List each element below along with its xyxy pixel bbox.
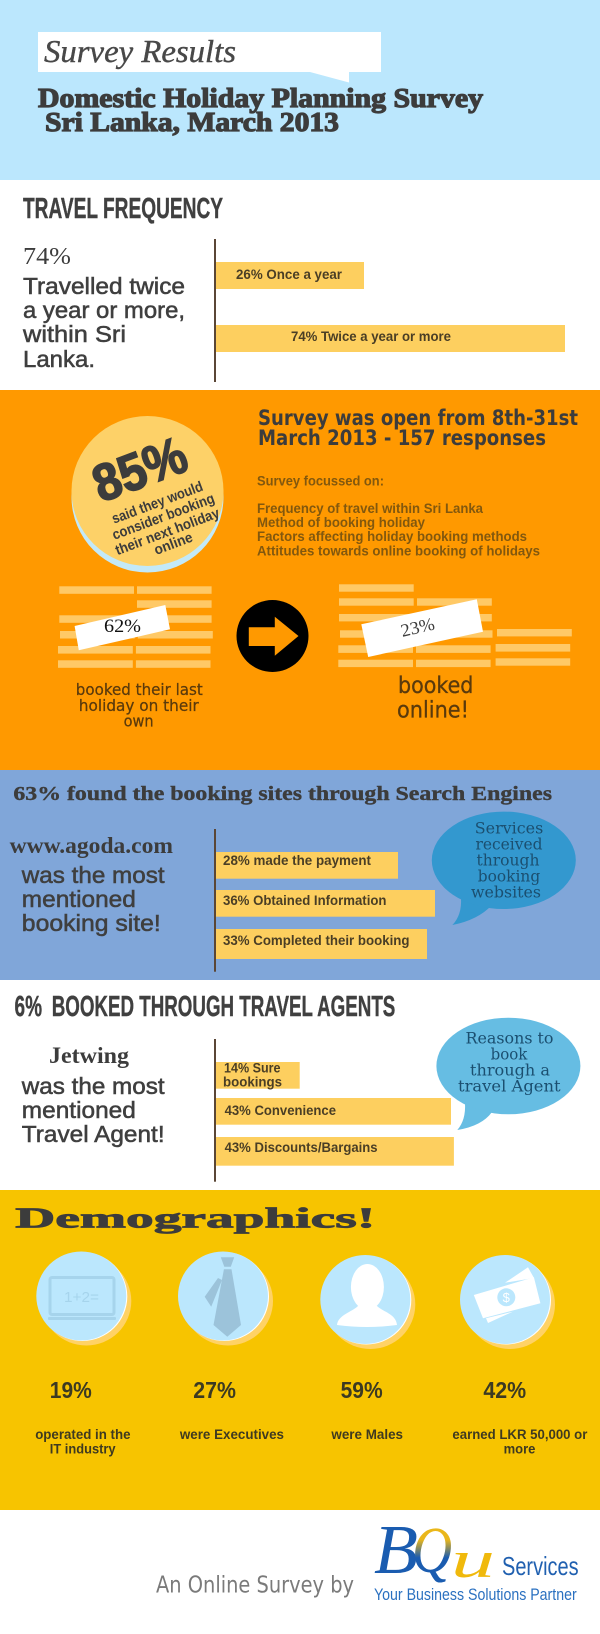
badge: 85%: [72, 416, 224, 572]
bar chart: bookings: [223, 1075, 282, 1090]
callout: services: websites: [471, 883, 541, 902]
caption: booked online: [397, 673, 473, 724]
title line 1: Domestic Holiday Planning Survey: [38, 83, 484, 113]
bar chart: 33% Completed their booking: [223, 933, 410, 948]
description: booking site!: [22, 910, 161, 936]
survey focus list: Frequency of travel within Sri Lanka: [257, 501, 483, 516]
caption: booked on their own: own: [124, 712, 154, 731]
callout: reasons: book: [491, 1044, 528, 1063]
heading: 6%: [14, 991, 42, 1023]
callout: reasons: [436, 1018, 580, 1130]
bar chart: [214, 829, 435, 972]
description: Lanka.: [23, 346, 95, 372]
bar chart: 43% Convenience: [225, 1103, 336, 1118]
stat: executives: were Executives: [179, 1427, 284, 1442]
callout: services: booking: [478, 867, 540, 886]
panel: travel agents: [14, 991, 580, 1182]
panel: footer: [156, 1512, 579, 1604]
caption: booked online: booked: [398, 673, 473, 699]
stat: income: more: [504, 1441, 536, 1456]
panel: booking sites: [0, 770, 600, 980]
bar chart: 26% Once a year: [236, 267, 343, 282]
label text: Survey Results: Survey Results: [44, 33, 236, 69]
description: Travel Agent!: [22, 1121, 165, 1147]
callout: reasons: Reasons to: [466, 1028, 554, 1047]
description: [21, 862, 165, 936]
caption: booked on their own: holiday on their: [79, 696, 199, 715]
panel: header: [0, 0, 600, 180]
callout: services: received: [476, 834, 542, 853]
heading: 63% found the booking sites through Search Engines: [13, 783, 552, 805]
caption: booked on their own: [76, 680, 203, 731]
stat: males: were Males: [330, 1427, 403, 1442]
logo: B: [374, 1512, 418, 1589]
callout: services: through: [476, 850, 540, 869]
callout: services: [432, 812, 576, 925]
icon: laptop: 1+2=: [64, 1289, 99, 1306]
icon: laptop: [36, 1252, 131, 1346]
survey dates: March 2013 - 157 responses: [258, 426, 546, 450]
panel: travel frequency: [22, 193, 565, 382]
description: [21, 1073, 165, 1147]
icon: arrow: [236, 600, 308, 672]
stack chart: 62%: 62%: [104, 616, 141, 637]
logo: Services: [502, 1551, 579, 1581]
callout: services: Services: [475, 818, 543, 837]
description: a year or more,: [23, 297, 185, 323]
description: [22, 273, 185, 372]
bar chart: [214, 239, 565, 382]
badge: 85%: 85%: [85, 426, 195, 514]
stack chart: 23%: 23%: [399, 614, 436, 641]
survey focus list: Survey focussed on:: [257, 474, 384, 488]
survey dates: [258, 406, 578, 450]
heading: TRAVEL FREQUENCY: [23, 193, 223, 225]
bar chart: [214, 1039, 454, 1182]
stat: males: 59%: [341, 1377, 383, 1403]
icon: tie: [178, 1252, 273, 1346]
site name: www.agoda.com: [10, 833, 173, 858]
heading: BOOKED THROUGH TRAVEL AGENTS: [52, 991, 395, 1023]
survey focus list: Attitudes towards online booking of holidays: [257, 544, 540, 558]
caption: booked online: online!: [397, 698, 469, 724]
stat: executives: 27%: [193, 1377, 236, 1403]
icon: money: [460, 1255, 555, 1349]
description: was the most: [21, 862, 165, 888]
badge: 85%: online: [152, 530, 195, 559]
credit text: An Online Survey by: [156, 1573, 354, 1599]
description: Travelled twice: [23, 273, 185, 299]
icon: money: $: [503, 1290, 511, 1305]
stat: income: [452, 1377, 588, 1456]
logo: u: [451, 1532, 495, 1589]
stack chart: 23%: [338, 584, 572, 667]
stat: income: earned LKR 50,000 or: [452, 1427, 588, 1442]
heading: Demographics!: [15, 1203, 375, 1234]
bar chart: 36% Obtained Information: [223, 893, 386, 908]
stat: males: [330, 1377, 403, 1442]
stat: IT industry: 19%: [50, 1377, 92, 1403]
icon: person: [320, 1255, 415, 1349]
stat: executives: [179, 1377, 284, 1442]
stat 74%: 74%: [23, 244, 71, 270]
badge: 85%: said they would: [110, 479, 205, 528]
panel: survey info: [0, 390, 600, 770]
description: within Sri: [22, 321, 126, 347]
panel: demographics: [0, 1190, 600, 1510]
survey focus list: Factors affecting holiday booking methods: [257, 529, 527, 544]
heading: [14, 991, 395, 1023]
badge: 85%: consider booking: [110, 491, 217, 544]
stat: IT industry: operated in the: [35, 1427, 131, 1442]
stat: IT industry: IT industry: [50, 1441, 116, 1456]
agent name: Jetwing: [49, 1043, 130, 1068]
survey focus list: Method of booking holiday: [257, 515, 425, 530]
description: mentioned: [22, 1097, 136, 1123]
speech label: [38, 32, 381, 82]
logo: [374, 1512, 579, 1604]
bar chart: 74% Twice a year or more: [291, 329, 451, 344]
bar chart: 28% made the payment: [223, 853, 371, 868]
callout: reasons: through a: [470, 1060, 550, 1079]
stack chart: 62%: [58, 586, 213, 668]
description: was the most: [21, 1073, 165, 1099]
callout: reasons: travel Agent: [458, 1077, 561, 1096]
description: mentioned: [22, 886, 136, 912]
survey focus list: [257, 474, 540, 558]
caption: booked on their own: booked their last: [76, 680, 203, 699]
logo: Q: [412, 1514, 452, 1587]
title line 2: Sri Lanka, March 2013: [45, 107, 339, 137]
bar chart: 14% Sure: [224, 1061, 281, 1076]
stat: IT industry: [35, 1377, 131, 1456]
bar chart: 43% Discounts/Bargains: [225, 1140, 378, 1155]
badge: 85%: their next holiday: [113, 505, 222, 559]
stat: income: 42%: [483, 1377, 526, 1403]
